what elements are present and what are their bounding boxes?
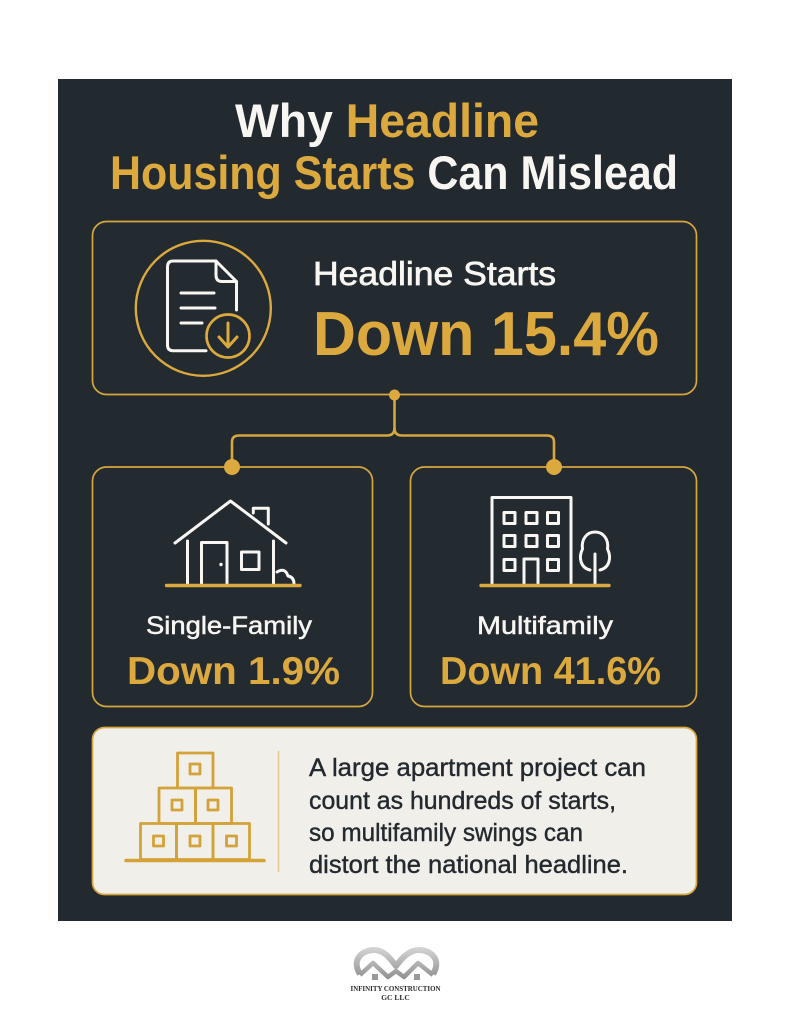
text: callout message: distort the national headline. — [309, 851, 628, 879]
icon: stacked boxes — [126, 753, 264, 860]
text: company name: INFINITY CONSTRUCTION — [350, 984, 441, 993]
divider — [278, 751, 280, 872]
text: callout message: count as hundreds of starts, — [309, 787, 616, 815]
label: single-family: Single-Family — [146, 612, 313, 640]
text: callout message: so multifamily swings can — [309, 819, 583, 847]
panel: callout — [92, 728, 696, 894]
panel: dark background — [58, 79, 732, 921]
title: Housing Starts Can Mislead — [110, 146, 678, 199]
text: callout message — [309, 754, 646, 879]
label: multifamily: Multifamily — [477, 612, 614, 640]
stat: down 1.9%: Down 1.9% — [127, 650, 340, 693]
text: callout message: A large apartment project can — [309, 754, 646, 782]
heading: headline starts: Headline Starts — [313, 255, 556, 292]
icon: logo mark — [357, 950, 436, 980]
logo: Infinity Construction GC LLC — [350, 950, 441, 1002]
stat: down 15.4%: Down 15.4% — [313, 300, 659, 369]
text: company name — [350, 984, 441, 1002]
icon: apartment building and tree — [481, 498, 610, 586]
title — [110, 94, 678, 199]
text: company name: GC LLC — [381, 993, 410, 1002]
icon: document with down arrow — [136, 241, 271, 376]
icon: house — [166, 501, 300, 586]
panel: multifamily — [410, 467, 696, 706]
connector: split into two categories — [224, 390, 562, 475]
panel: single-family — [92, 467, 372, 706]
title: Why Headline — [235, 94, 539, 147]
stat: down 41.6%: Down 41.6% — [440, 650, 661, 693]
panel: headline starts — [92, 222, 696, 394]
